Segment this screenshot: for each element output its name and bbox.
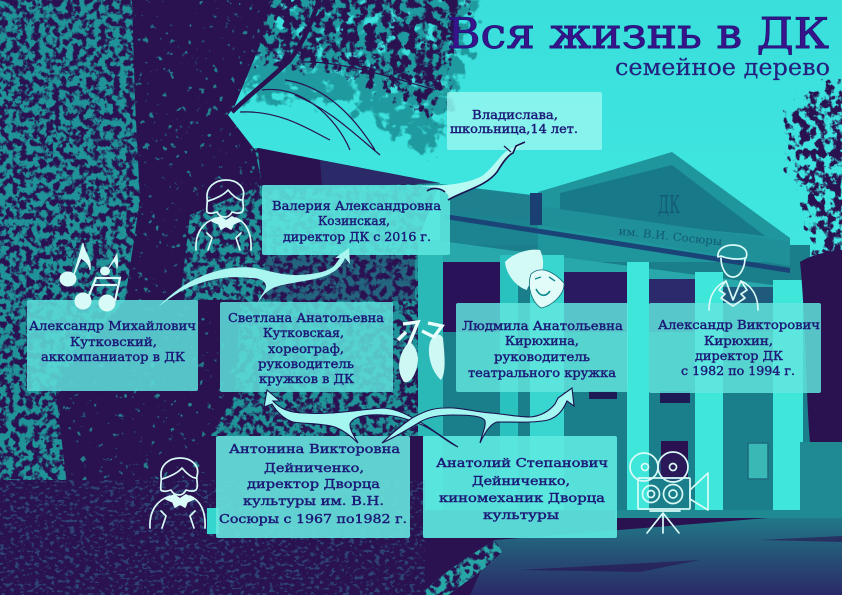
icon: ballet shoes [398,322,445,382]
box: Alexander Kutkovsky: Александр Михайлович [29,319,196,333]
box: Alexander Kiryukhin [649,303,821,393]
tree top right [775,65,842,270]
icon: woman (Antonina) [150,458,205,528]
box: Lyudmila: руководитель [494,350,591,364]
box: Antonina [207,436,410,538]
ground and road [0,510,842,595]
box: Anatoly: Анатолий Степанович [436,456,608,470]
box: Svetlana: хореограф, [268,342,344,356]
box: Lyudmila: театрального кружка [468,366,616,380]
box: Alexander Kutkovsky: Кутковский, [70,335,157,349]
box: Alexander Kiryukhin: Александр Викторович [658,318,820,332]
box: Antonina: Сосюры с 1967 по1982 г. [219,512,407,526]
left foliage [0,0,145,540]
box: Alexander Kiryukhin: директор ДК [695,349,784,363]
windows [660,391,690,403]
box: Lyudmila: Людмила Анатольевна [462,319,623,333]
arrow: parents to Lyudmila [382,388,574,443]
box: Antonina: культуры им. В.Н. [243,494,384,508]
building [415,152,842,515]
box: Alexander Kutkovsky [27,300,198,391]
box: Lyudmila: Кирюхина, [505,334,579,348]
title: Вся жизнь в ДК [447,9,830,58]
building: им. В.И. Сосюры [618,225,723,248]
box: Antonina: директор Дворца [247,477,380,491]
box: Svetlana: руководитель [258,357,355,371]
box: Valeria: Валерия Александровна [272,199,441,213]
dark openings under the frieze [443,262,500,332]
box: Vladislava [447,92,602,150]
box: Svetlana: кружков в ДК [259,372,355,386]
box: Svetlana [220,302,393,392]
columns [418,255,443,510]
branches over the sky [225,0,490,175]
box: Lyudmila [456,303,628,392]
box: Valeria [262,185,450,255]
icon: film camera [630,452,708,533]
subtitle: семейное дерево [615,55,830,81]
box: Vladislava: школьница,14 лет. [450,122,578,136]
icon: woman (director) [196,180,251,250]
building: ДК [658,191,680,219]
box: Anatoly: Дейниченко, [472,474,570,488]
box: Vladislava: Владислава, [472,108,558,122]
box: Alexander Kutkovsky: аккомпаниатор в ДК [41,350,186,364]
icon: man in suit [709,245,758,310]
icon: theatre masks [505,250,564,308]
box: Svetlana: Кутковская, [263,326,344,340]
tree trunk mass [55,0,272,510]
box: Valeria: Козинская, [318,214,390,228]
box: Anatoly [423,436,617,538]
tree lower right [800,250,842,442]
box: Antonina: Антонина Викторовна [229,442,400,456]
arrow: Valeria to Vladislava [418,142,525,200]
box: Svetlana: Светлана Анатольевна [228,311,384,325]
box: Anatoly: культуры [483,508,560,522]
box: Valeria: директор ДК с 2016 г. [283,230,431,244]
box: Anatoly: киномеханик Дворца [439,491,605,505]
left wing roof [258,148,440,190]
icon: music notes [60,243,120,311]
box: Alexander Kiryukhin: с 1982 по 1994 г. [681,364,795,378]
box: Alexander Kiryukhin: Кирюхин, [704,334,773,348]
arrow: parents to Valeria [158,248,350,307]
arrow: parents to Svetlana [264,390,458,447]
box: Antonina: Дейниченко, [264,461,364,475]
